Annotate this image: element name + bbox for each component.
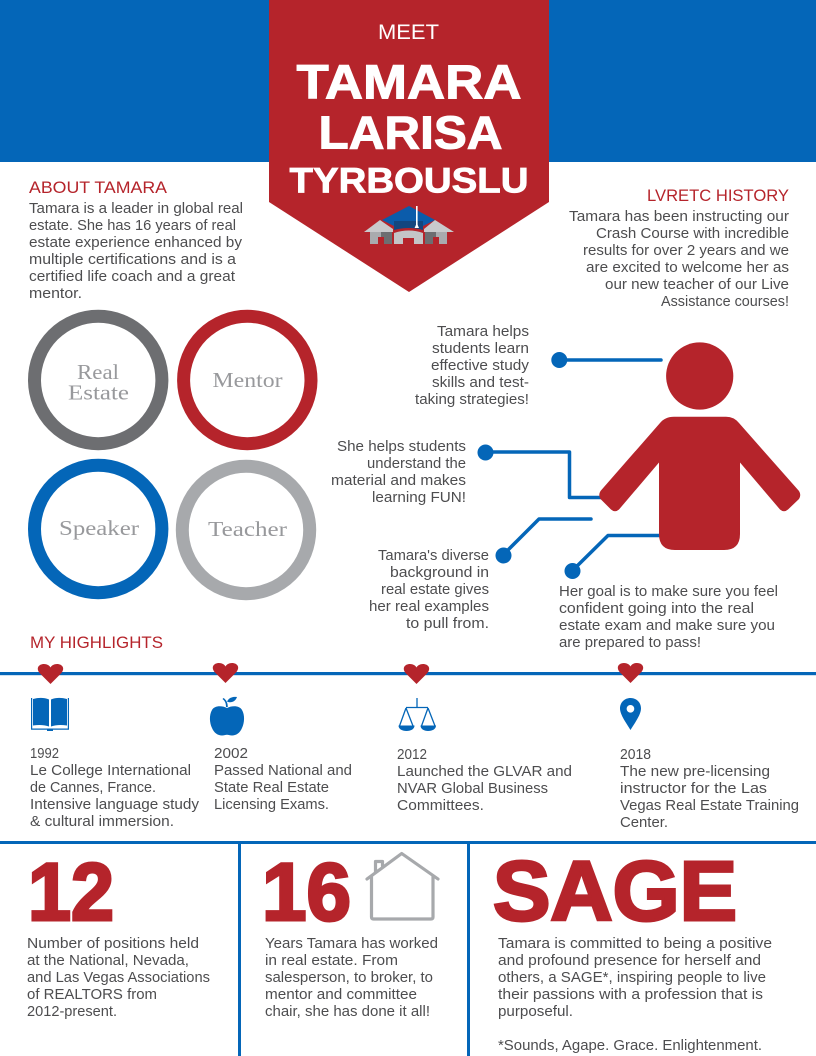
- title: meet: MEET: [378, 21, 439, 44]
- callout: makes learning fun: understand the: [367, 456, 466, 472]
- highlight: 1992: Intensive language study: [30, 797, 200, 813]
- stat: 16: chair, she has done it all!: [265, 1004, 430, 1020]
- stat: sage: *Sounds, Agape. Grace. Enlightenment.: [498, 1038, 762, 1054]
- title: name: TYRBOUSLU: [290, 162, 528, 200]
- highlight: 2018: instructor for the Las: [620, 781, 767, 797]
- highlight: 1992: Le College International: [30, 763, 191, 779]
- about tamara: ABOUT TAMARA: [29, 178, 168, 197]
- highlight: 2012: [397, 747, 572, 814]
- callout: diverse background: real estate gives: [381, 582, 489, 598]
- highlight: 2018: [620, 747, 799, 831]
- highlight: 2012: 2012: [397, 747, 427, 763]
- callout: diverse background: background in: [390, 565, 489, 581]
- callout: makes learning fun: material and makes: [331, 473, 466, 489]
- ring: speaker: [34, 465, 162, 593]
- stat: sage: purposeful.: [498, 1004, 573, 1020]
- header blue band: [0, 0, 816, 162]
- highlight: 2002: Licensing Exams.: [214, 797, 329, 813]
- lvretc history: LVRETC HISTORY: [647, 186, 789, 205]
- ring: teacher: [182, 466, 310, 594]
- lvretc history: Tamara has been instructing our: [569, 209, 789, 225]
- highlight: 2002: 2002: [214, 746, 248, 762]
- stat: 12: 2012-present.: [27, 1004, 117, 1020]
- callout: study skills: effective study: [431, 358, 530, 374]
- about tamara: Tamara is a leader in global real: [29, 201, 243, 217]
- stat: sage: Tamara is committed to being a positive: [498, 936, 772, 952]
- stat: 12: and Las Vegas Associations: [27, 970, 210, 986]
- ring: real estate: Real: [77, 360, 119, 384]
- callout: diverse background: to pull from.: [406, 616, 489, 632]
- lvretc history: our new teacher of our Live: [605, 277, 789, 293]
- stat: 16: 16: [262, 847, 351, 938]
- stat: sage: [493, 844, 772, 1054]
- icon: apple: [210, 697, 244, 736]
- title: name: [290, 56, 528, 200]
- highlight: 2002: State Real Estate: [214, 780, 329, 796]
- callout: makes learning fun: learning FUN!: [372, 490, 466, 506]
- callout: diverse background: [369, 548, 489, 632]
- callout: study skills: students learn: [432, 341, 529, 357]
- highlight: 2018: Center.: [620, 815, 668, 831]
- stat: 16: Years Tamara has worked: [265, 936, 438, 952]
- highlight: 2012: Launched the GLVAR and: [397, 764, 572, 780]
- callout: her goal: are prepared to pass!: [559, 635, 701, 651]
- highlight: 1992: 1992: [30, 746, 59, 762]
- callout: study skills: taking strategies!: [415, 392, 529, 408]
- about tamara: estate experience enhanced by: [29, 235, 243, 251]
- ring: real estate: Estate: [68, 380, 129, 404]
- about tamara: estate. She has 16 years of real: [29, 218, 236, 234]
- stat: 16: in real estate. From: [265, 953, 398, 969]
- about tamara: mentor.: [29, 286, 82, 302]
- highlight: 2018: The new pre-licensing: [620, 764, 770, 780]
- stat: 16: salesperson, to broker, to: [265, 970, 433, 986]
- lvretc history: are excited to welcome her as: [586, 260, 789, 276]
- title: name: LARISA: [318, 106, 502, 158]
- stats frame lines: [0, 842, 816, 1056]
- callout: her goal: Her goal is to make sure you feel: [559, 584, 778, 600]
- lvretc history: Assistance courses!: [661, 294, 789, 310]
- callout: diverse background: her real examples: [369, 599, 489, 615]
- callout: makes learning fun: [331, 439, 466, 506]
- icon: map pin: [620, 698, 641, 730]
- highlight: 1992: & cultural immersion.: [30, 814, 174, 830]
- stat: sage: others, a SAGE*, inspiring people to live: [498, 970, 766, 986]
- callout: study skills: skills and test-: [432, 375, 529, 391]
- icon: book: [31, 698, 69, 731]
- ring: speaker: Speaker: [59, 516, 139, 540]
- callout: study skills: [415, 324, 530, 408]
- ring: mentor: [184, 316, 311, 444]
- stat: 12: at the National, Nevada,: [27, 953, 189, 969]
- timeline line: [0, 672, 816, 675]
- ring: mentor: Mentor: [212, 368, 282, 392]
- timeline hearts: [38, 663, 643, 684]
- red title banner: [269, 0, 549, 292]
- highlight: 2012: Committees.: [397, 798, 484, 814]
- highlight: 2012: NVAR Global Business: [397, 781, 548, 797]
- logo: graduation cap and houses: [364, 206, 454, 244]
- callout: her goal: confident going into the real: [559, 601, 754, 617]
- highlight: 2002: [214, 746, 352, 813]
- about tamara: multiple certifications and is a: [29, 252, 237, 268]
- stat: 12: Number of positions held: [27, 936, 199, 952]
- highlight: 1992: de Cannes, France.: [30, 780, 156, 796]
- title: name: TAMARA: [296, 56, 522, 110]
- icon: house outline: [367, 854, 438, 919]
- stat: sage: and profound presence for herself and: [498, 953, 761, 969]
- callout: her goal: estate exam and make sure you: [559, 618, 775, 634]
- lvretc history: results for over 2 years and we: [583, 243, 789, 259]
- stat: 12: of REALTORS from: [27, 987, 157, 1003]
- callout: makes learning fun: She helps students: [337, 439, 466, 455]
- highlight: 2002: Passed National and: [214, 763, 352, 779]
- highlight: 2018: Vegas Real Estate Training: [620, 798, 799, 814]
- connector lines: [478, 352, 662, 579]
- stat: 16: [262, 847, 438, 1020]
- lvretc history: Crash Course with incredible: [596, 226, 789, 242]
- stat: 12: 12: [28, 847, 114, 938]
- stat: 12: [27, 847, 210, 1020]
- ring: teacher: Teacher: [208, 517, 287, 541]
- about tamara: [29, 178, 243, 302]
- highlight: 2018: 2018: [620, 747, 651, 763]
- stat: sage: their passions with a profession that is: [498, 987, 763, 1003]
- stat: sage: SAGE: [493, 844, 737, 938]
- icon: scales: [398, 698, 436, 731]
- my highlights heading: MY HIGHLIGHTS: [30, 633, 163, 652]
- about tamara: certified life coach and a great: [29, 269, 235, 285]
- lvretc history: [569, 186, 789, 310]
- stat: 16: mentor and committee: [265, 987, 417, 1003]
- callout: study skills: Tamara helps: [437, 324, 529, 340]
- highlight: 1992: [30, 746, 200, 830]
- ring: real estate: [34, 316, 162, 444]
- person figure: [599, 342, 800, 550]
- callout: her goal: [559, 584, 778, 651]
- callout: diverse background: Tamara's diverse: [378, 548, 489, 564]
